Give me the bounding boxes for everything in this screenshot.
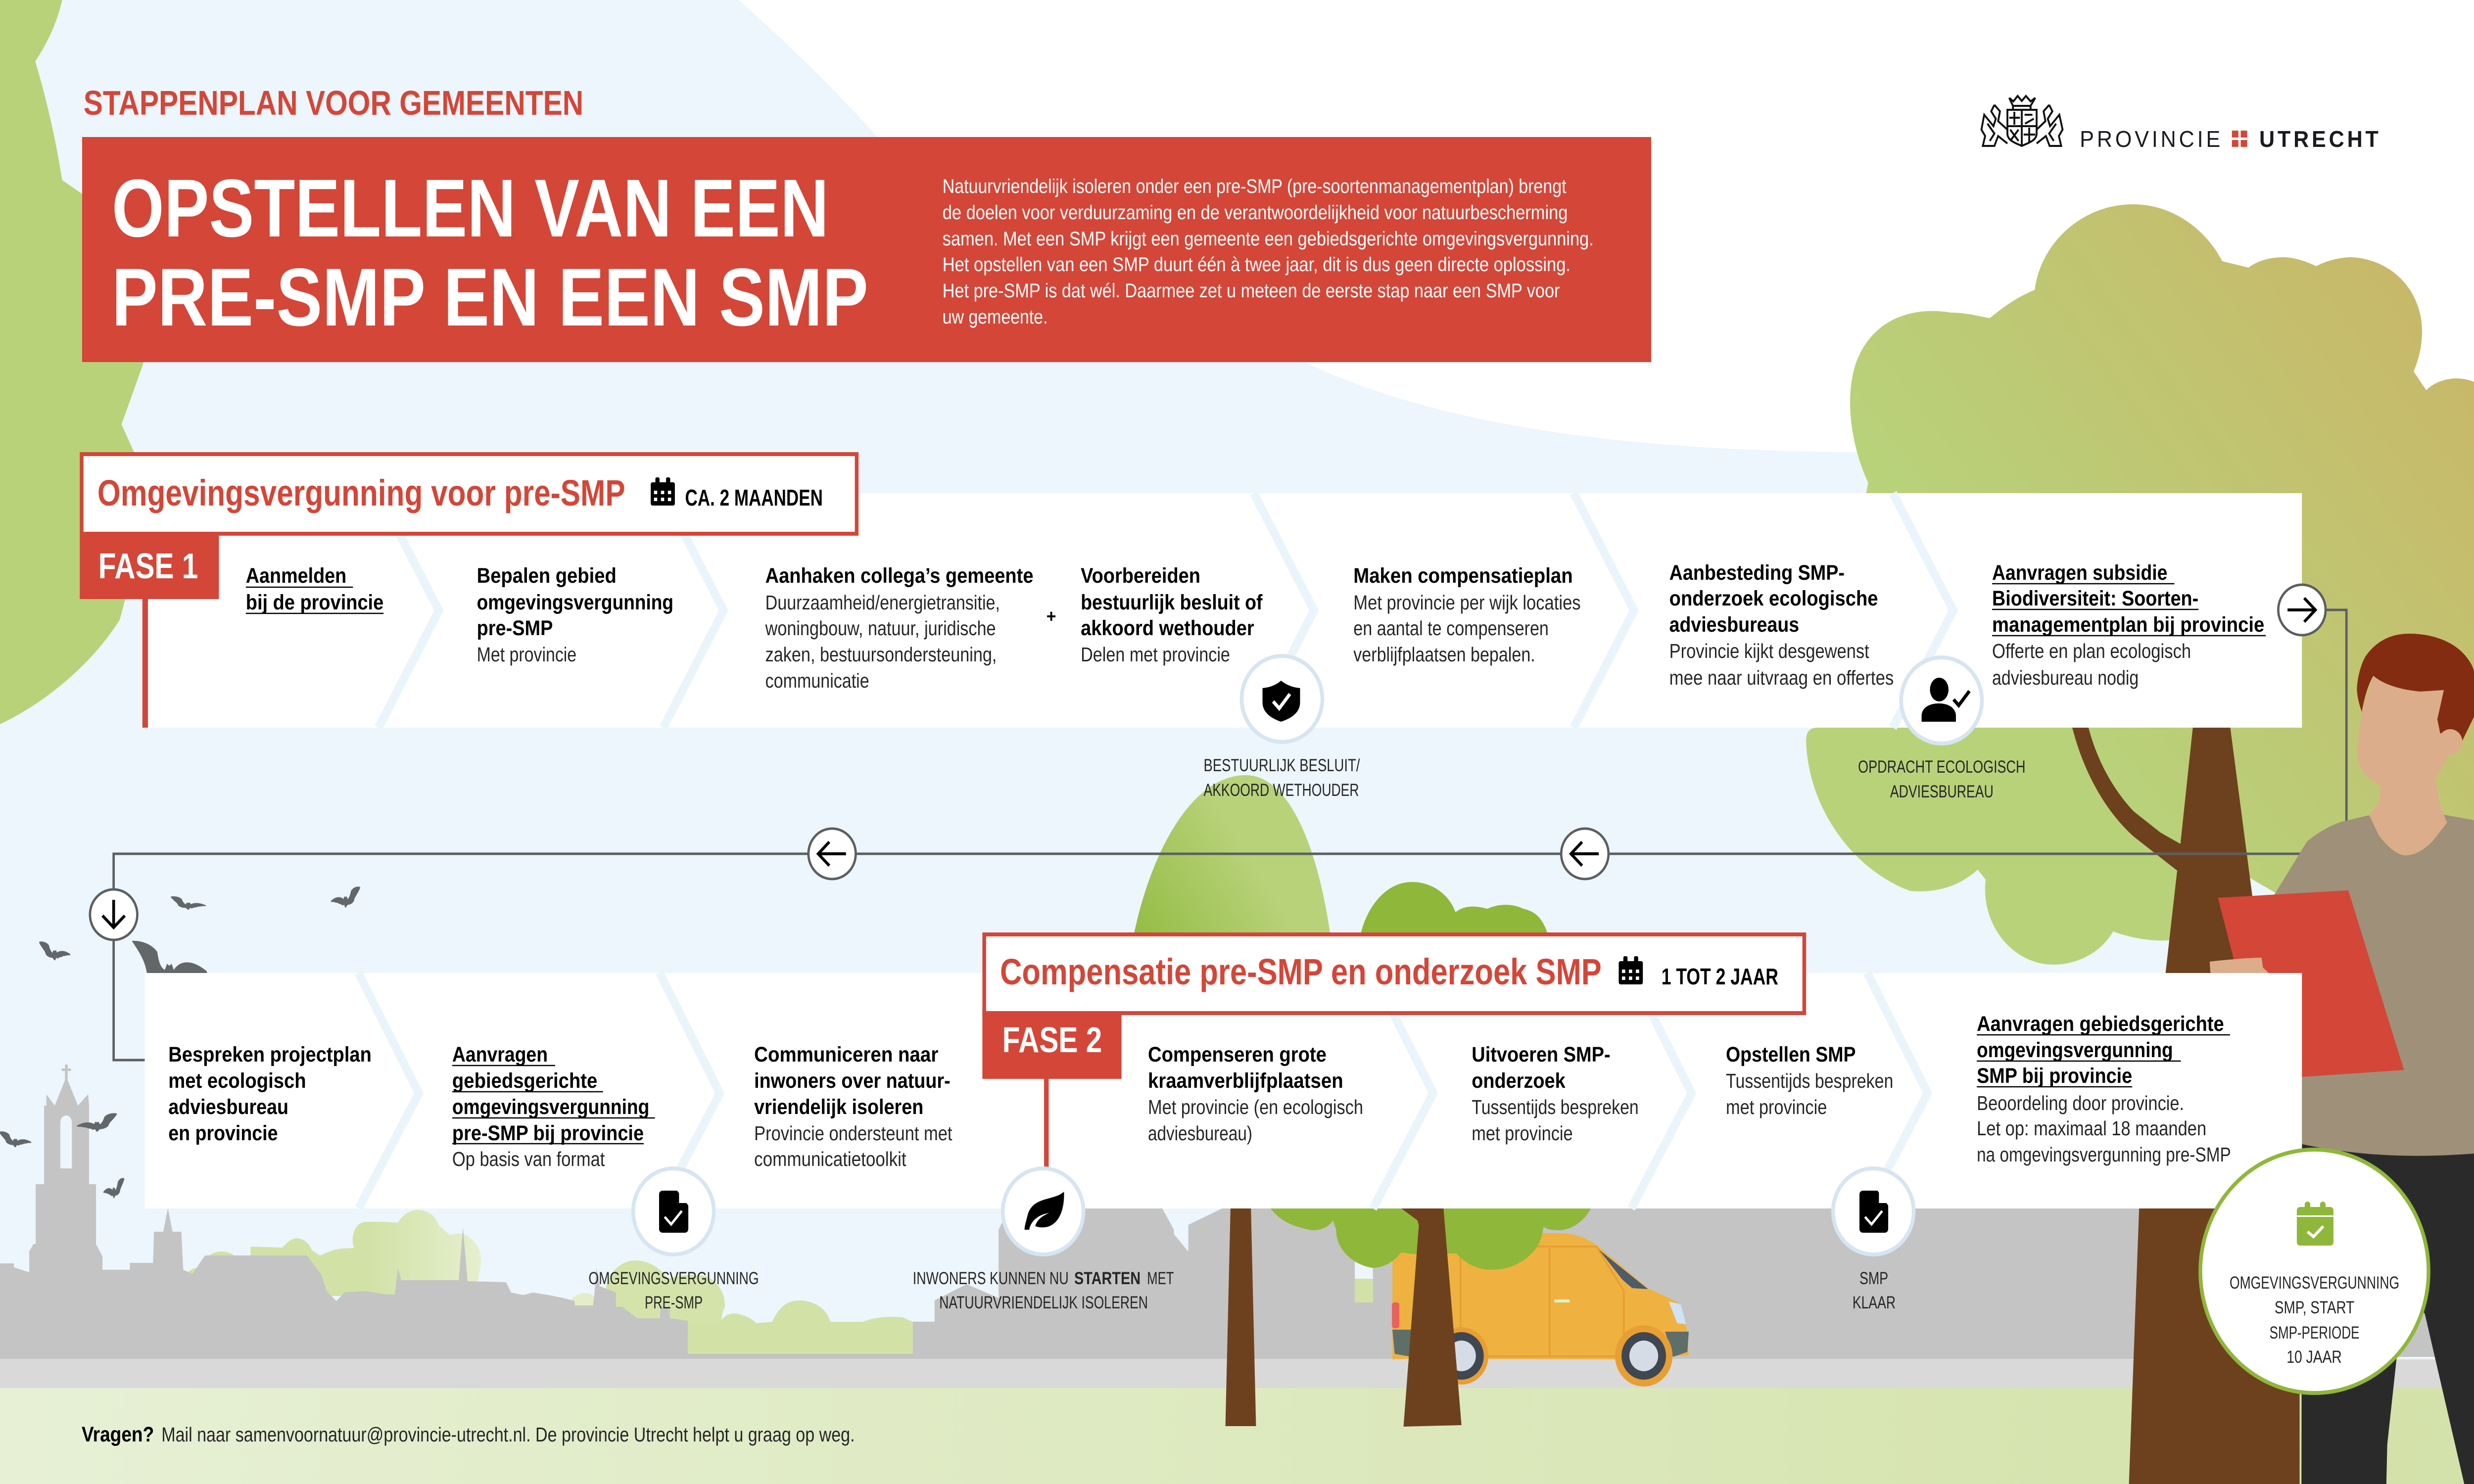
step: voorbereiden besluit: bestuurlijk besluit of	[1081, 590, 1263, 614]
step: uitvoeren onderzoek: Tussentijds bespreken	[1472, 1096, 1639, 1118]
step: aanvragen omgevingsvergunning: Aanvragen	[452, 1042, 548, 1066]
step: compenseren: kraamverblijfplaatsen	[1148, 1068, 1343, 1092]
intro text: uw gemeente.	[943, 306, 1048, 328]
street tree trunk left	[1226, 1207, 1256, 1426]
step: compensatieplan: en aantal te compenseren	[1353, 617, 1549, 640]
step: bepalen gebied	[477, 563, 673, 666]
caption: OMGEVINGSVERGUNNING	[2230, 1273, 2399, 1293]
step: aanhaken collega's: Aanhaken collega’s gemeente	[765, 563, 1033, 587]
step: compensatieplan: Maken compensatieplan	[1353, 563, 1573, 587]
caption	[913, 1269, 1174, 1312]
step: voorbereiden besluit: akkoord wethouder	[1081, 616, 1254, 640]
step: bespreken projectplan: en provincie	[168, 1121, 278, 1145]
intro text: de doelen voor verduurzaming en de verantwoordelijkheid voor natuurbescherming	[943, 202, 1568, 224]
right tree canopy	[1806, 204, 2474, 965]
step: aanmelden: Aanmelden	[246, 563, 346, 587]
step: opstellen SMP: Tussentijds bespreken	[1726, 1070, 1893, 1092]
arrow right circle	[2278, 585, 2326, 635]
caption	[1853, 1269, 1896, 1312]
step: compensatieplan: verblijfplaatsen bepalen.	[1353, 644, 1535, 666]
milestone: omgevingsvergunning pre-smp	[589, 1168, 759, 1312]
step: uitvoeren onderzoek: onderzoek	[1472, 1068, 1566, 1092]
icon: document check	[1859, 1191, 1888, 1233]
step: aanbesteding: mee naar uitvraag en offertes	[1669, 667, 1894, 689]
arrow down circle	[90, 889, 137, 940]
icon: leaf	[1025, 1192, 1064, 1230]
step: aanvragen gebiedsgerichte	[1977, 1012, 2231, 1166]
caption: MET	[1147, 1269, 1174, 1288]
step: aanhaken collega's: communicatie	[765, 670, 869, 692]
caption: SMP, START	[2275, 1298, 2354, 1317]
footer contact text: Mail naar samenvoornatuur@provincie-utrecht.nl. De provincie Utrecht helpt u graag op weg.	[161, 1424, 855, 1446]
caption: PRE-SMP	[645, 1293, 703, 1312]
legs	[2301, 1138, 2474, 1484]
caption: SMP-PERIODE	[2270, 1323, 2359, 1343]
milestone: omgevingsvergunning smp circle	[2200, 1150, 2428, 1393]
background shrubs behind skyline	[183, 1210, 913, 1354]
step: aanvragen subsidie: managementplan bij provincie	[1992, 612, 2264, 636]
caption: ADVIESBUREAU	[1890, 782, 1994, 801]
heading: stappenplan: STAPPENPLAN VOOR GEMEENTEN	[84, 84, 583, 122]
step: compenseren: Met provincie (en ecologisch	[1148, 1096, 1363, 1118]
step: aanvragen gebiedsgerichte: omgevingsvergunning	[1977, 1038, 2173, 1062]
road marking	[2393, 1357, 2435, 1359]
step: opstellen SMP: Opstellen SMP	[1726, 1042, 1856, 1066]
step: aanhaken collega's: zaken, bestuursondersteuning,	[765, 644, 997, 666]
caption: OPDRACHT ECOLOGISCH	[1858, 757, 2026, 777]
shirt	[2275, 815, 2474, 1156]
caption	[589, 1269, 759, 1312]
caption: INWONERS KUNNEN NU	[913, 1269, 1069, 1288]
step: aanbesteding	[1669, 560, 1894, 689]
big tree trunk	[2071, 722, 2300, 1484]
step: aanvragen omgevingsvergunning: Op basis van format	[452, 1148, 605, 1170]
intro text: Het opstellen van een SMP duurt één à twee jaar, dit is dus geen directe oplossing.	[943, 254, 1570, 276]
step: bepalen gebied: omgevingsvergunning	[477, 590, 673, 614]
skyline silhouette	[0, 1065, 2474, 1359]
header: compensatie	[984, 934, 1804, 1013]
step: compenseren: Compenseren grote	[1148, 1042, 1327, 1066]
step: aanbesteding: onderzoek ecologische	[1669, 586, 1878, 610]
header: compensatie: 1 TOT 2 JAAR	[1662, 965, 1778, 989]
grass footer band	[0, 1388, 2474, 1484]
intro text: samen. Met een SMP krijgt een gemeente een gebiedsgerichte omgevingsvergunning.	[943, 228, 1594, 250]
step: aanmelden: bij de provincie	[246, 590, 383, 614]
ear	[2438, 729, 2463, 755]
step: aanvragen omgevingsvergunning: gebiedsgerichte	[452, 1068, 597, 1092]
chevrons fase 2	[359, 973, 1928, 1208]
bats	[0, 887, 359, 1198]
milestone: inwoners	[913, 1168, 1174, 1312]
red squares	[2232, 131, 2247, 147]
step: communiceren: Provincie ondersteunt met	[754, 1122, 952, 1145]
step: aanvragen gebiedsgerichte: SMP bij provincie	[1977, 1064, 2132, 1087]
title panel	[82, 137, 1651, 362]
step: communiceren	[754, 1042, 952, 1170]
step: aanbesteding: Provincie kijkt desgewenst	[1669, 640, 1869, 662]
intro text	[943, 176, 1594, 328]
header: omgevingsvergunning: Omgevingsvergunning voor pre-SMP	[97, 473, 625, 514]
step: communiceren: communicatietoolkit	[754, 1148, 906, 1170]
step: aanvragen omgevingsvergunning	[452, 1042, 655, 1170]
step: bespreken projectplan: Bespreken projectplan	[168, 1042, 372, 1066]
footer contact text: Vragen?	[82, 1422, 154, 1446]
step: communiceren: vriendelijk isoleren	[754, 1095, 923, 1118]
hand	[2210, 958, 2270, 974]
step: aanhaken collega's: Duurzaamheid/energietransitie,	[765, 592, 1000, 614]
wordmark: PROVINCIE	[2080, 127, 2220, 152]
arrow left circle 1	[1561, 829, 1609, 879]
caption: 10 JAAR	[2286, 1347, 2342, 1367]
wordmark bold: UTRECHT	[2259, 127, 2379, 152]
van	[1392, 1233, 1689, 1387]
step: aanvragen subsidie: Biodiversiteit: Soorten-	[1992, 586, 2198, 610]
step: uitvoeren onderzoek	[1472, 1042, 1639, 1145]
header: omgevingsvergunning	[82, 454, 856, 534]
left tree canopy	[0, 0, 144, 724]
fase 2 badge: FASE 2	[1002, 1020, 1102, 1060]
caption: KLAAR	[1853, 1293, 1896, 1312]
step: aanvragen gebiedsgerichte: Beoordeling door provincie.	[1977, 1092, 2184, 1114]
center shrub	[1361, 882, 1555, 984]
icon: calendar	[1618, 956, 1643, 984]
intro text: Natuurvriendelijk isoleren onder een pre-SMP (pre-soortenmanagementplan) brengt	[943, 176, 1567, 197]
caption: NATUURVRIENDELIJK ISOLEREN	[939, 1293, 1148, 1312]
milestone: smp klaar	[1833, 1168, 1914, 1312]
step: communiceren: Communiceren naar	[754, 1042, 938, 1066]
connector line	[114, 610, 2346, 1060]
step: bepalen gebied: Bepalen gebied	[477, 563, 617, 587]
person	[2210, 634, 2474, 1484]
step: aanhaken collega's: woningbouw, natuur, juridische	[765, 617, 996, 640]
fase 2 badge	[982, 1013, 1122, 1079]
intro text: Het pre-SMP is dat wél. Daarmee zet u meteen de eerste stap naar een SMP voor	[943, 280, 1560, 302]
panel: fase 1 steps	[144, 493, 2302, 728]
title: PRE-SMP EN EEN SMP	[112, 251, 868, 343]
step: bepalen gebied: pre-SMP	[477, 616, 553, 640]
step: aanbesteding: Aanbesteding SMP-	[1669, 560, 1845, 584]
step: aanvragen subsidie: Offerte en plan ecologisch	[1992, 640, 2191, 662]
step: communiceren: inwoners over natuur-	[754, 1068, 951, 1092]
road	[0, 1359, 2474, 1388]
fase 1 line	[143, 596, 148, 728]
step: uitvoeren onderzoek: Uitvoeren SMP-	[1472, 1042, 1611, 1066]
step: aanvragen gebiedsgerichte: Aanvragen gebiedsgerichte	[1977, 1012, 2224, 1035]
icon: shield	[1263, 681, 1300, 722]
fase 2 line	[1044, 1076, 1048, 1170]
step: aanvragen gebiedsgerichte: na omgevingsvergunning pre-SMP	[1977, 1144, 2231, 1166]
background white hill	[739, 0, 2474, 452]
caption	[1858, 757, 2026, 801]
panel: fase 2 steps	[144, 973, 2302, 1208]
step: aanvragen subsidie: Aanvragen subsidie	[1992, 560, 2167, 584]
hair	[2357, 634, 2474, 741]
caption: AKKOORD WETHOUDER	[1204, 781, 1359, 800]
caption: STARTEN	[1074, 1269, 1141, 1288]
center tree dome	[1126, 775, 1336, 984]
caption: SMP	[1859, 1269, 1888, 1288]
step: compensatieplan	[1353, 563, 1581, 666]
step: opstellen SMP: met provincie	[1726, 1096, 1827, 1118]
step: aanvragen subsidie: adviesbureau nodig	[1992, 667, 2139, 689]
step: voorbereiden besluit: Delen met provincie	[1081, 644, 1230, 666]
step: bespreken projectplan: met ecologisch	[168, 1068, 306, 1092]
step: aanvragen subsidie	[1992, 560, 2266, 689]
clipboard	[2218, 890, 2404, 1077]
fase 1 badge	[80, 534, 219, 599]
face and neck	[2357, 676, 2454, 855]
step: bespreken projectplan	[168, 1042, 372, 1145]
crest	[1981, 96, 2063, 146]
step: aanvragen omgevingsvergunning: omgevingsvergunning	[452, 1095, 649, 1118]
step: voorbereiden besluit	[1081, 563, 1263, 666]
icon: document check	[659, 1191, 688, 1233]
milestone: opdracht	[1858, 657, 2026, 801]
header: compensatie: Compensatie pre-SMP en onderzoek SMP	[1000, 952, 1602, 993]
caption: BESTUURLIJK BESLUIT/	[1204, 756, 1360, 775]
step: bespreken projectplan: adviesbureau	[168, 1095, 288, 1118]
milestone: besluit	[1204, 656, 1360, 800]
step: aanvragen omgevingsvergunning: pre-SMP bij provincie	[452, 1121, 644, 1145]
caption	[2230, 1273, 2399, 1367]
caption: OMGEVINGSVERGUNNING	[589, 1269, 759, 1288]
step: aanhaken collega's	[765, 563, 1033, 692]
street tree trunk right	[1399, 1207, 1462, 1427]
step: compensatieplan: Met provincie per wijk locaties	[1353, 592, 1581, 614]
logo provincie utrecht	[1981, 96, 2379, 152]
step: aanbesteding: adviesbureaus	[1669, 612, 1799, 636]
step: compenseren	[1148, 1042, 1363, 1145]
icon: calendar	[651, 477, 675, 506]
title	[112, 162, 868, 343]
step: aanvragen gebiedsgerichte: Let op: maximaal 18 maanden	[1977, 1117, 2206, 1140]
arrow left circle 2	[809, 829, 856, 879]
step: opstellen SMP	[1726, 1042, 1893, 1118]
fase 1 badge: FASE 1	[98, 546, 198, 586]
header: omgevingsvergunning: CA. 2 MAANDEN	[685, 486, 823, 510]
chevrons fase 1	[379, 493, 1953, 728]
step: aanmelden	[246, 563, 383, 614]
small gap in city	[1355, 1237, 1373, 1302]
step: uitvoeren onderzoek: met provincie	[1472, 1122, 1573, 1145]
icon: calendar check	[2297, 1202, 2333, 1246]
step: voorbereiden besluit: Voorbereiden	[1081, 563, 1200, 587]
street tree crown	[1270, 1207, 1591, 1270]
icon: person check	[1922, 678, 1969, 722]
step: bepalen gebied: Met provincie	[477, 644, 576, 666]
caption	[1204, 756, 1360, 800]
title: OPSTELLEN VAN EEN	[112, 162, 829, 254]
plus sign: +	[1047, 606, 1056, 626]
step: compenseren: adviesbureau)	[1148, 1122, 1252, 1145]
